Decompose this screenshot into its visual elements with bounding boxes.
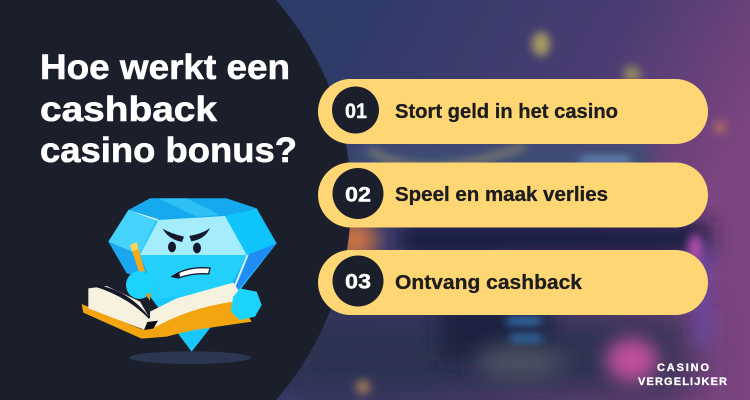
icon: ground shadow — [129, 351, 251, 364]
title: Hoe werkt een — [40, 48, 290, 87]
step 2: 02 — [345, 184, 371, 206]
icon: face — [163, 228, 210, 278]
logo: Casino Vergelijker — [638, 362, 727, 388]
title: cashback — [40, 90, 218, 129]
step 3: Ontvang cashback — [395, 272, 583, 294]
icon: right hand — [231, 288, 262, 320]
step 1: 01 — [345, 100, 367, 123]
step 1: Stort geld in het casino — [395, 101, 618, 123]
step 1 — [318, 79, 708, 144]
dark curved panel — [0, 0, 351, 400]
step 3 — [318, 250, 708, 315]
logo: Casino Vergelijker: CASINO — [657, 362, 709, 374]
step 2: Speel en maak verlies — [395, 184, 608, 206]
title: casino bonus? — [40, 131, 297, 170]
logo: Casino Vergelijker: VERGELIJKER — [638, 376, 727, 388]
title — [40, 48, 297, 170]
step 3: 03 — [345, 270, 371, 294]
icon: diamond body — [108, 198, 277, 352]
icon: open book — [82, 283, 252, 339]
step 2 — [318, 162, 708, 228]
background: blurred casino scene — [276, 0, 750, 400]
icon: diamond character reading a book — [82, 198, 277, 364]
icon: pencil and hand — [126, 242, 153, 301]
